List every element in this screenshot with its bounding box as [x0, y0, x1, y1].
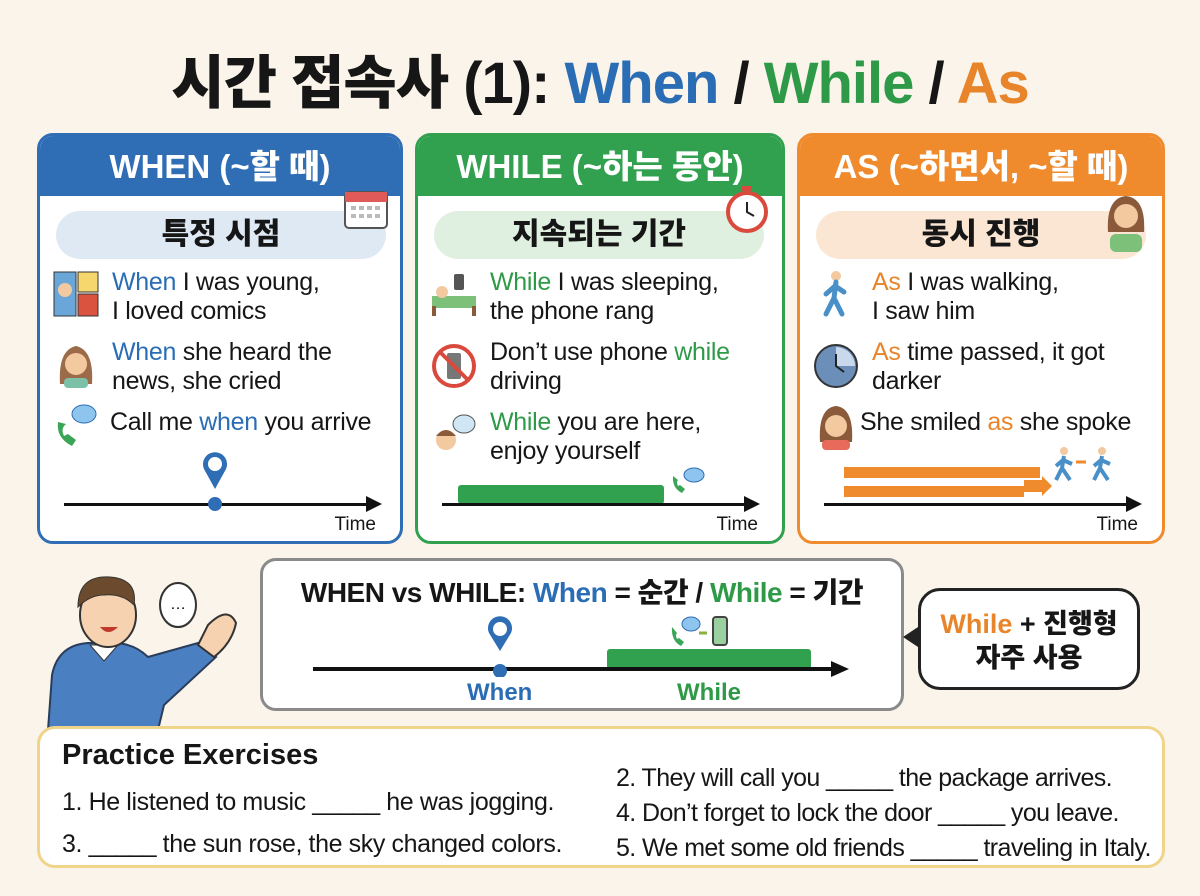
subheading: 지속되는 기간: 지속되는 기간 — [512, 218, 686, 251]
example 2: Don’t use phone while — [490, 338, 730, 366]
example 1 — [112, 268, 320, 325]
icon: phone with bubble — [58, 404, 96, 446]
header: AS: AS (~하면서, ~할 때) — [834, 148, 1128, 185]
icon: boy thinking — [436, 414, 476, 450]
panel: WHEN vs WHILE comparison — [260, 558, 904, 711]
example 2 — [490, 338, 730, 395]
subheading: 특정 시점 — [56, 211, 386, 259]
panel: AS — [797, 133, 1165, 544]
comparison timeline: While — [677, 679, 741, 706]
callout: While + 진행형 — [918, 588, 1140, 690]
exercises right column: 2. They will call you _____ the package arrives. — [616, 764, 1112, 792]
example 2: When she heard the — [112, 338, 332, 366]
icon: no phone — [432, 344, 476, 388]
illustration: teacher — [47, 576, 237, 728]
panel: WHILE: Time — [716, 514, 758, 535]
example 2: darker — [872, 367, 941, 395]
example 2: driving — [490, 367, 562, 395]
example 1: I loved comics — [112, 297, 266, 325]
example 3: She smiled as she spoke — [860, 408, 1131, 436]
header: WHEN — [40, 136, 400, 196]
example 2 — [112, 338, 332, 395]
icon: sleeping — [432, 274, 476, 316]
example 1: When I was young, — [112, 268, 320, 296]
exercises right column: 4. Don’t forget to lock the door _____ you leave. — [616, 799, 1119, 827]
icon: comics — [54, 272, 98, 316]
comparison timeline — [313, 616, 849, 706]
header: WHILE: WHILE (~하는 동안) — [456, 148, 744, 185]
example 1: As I was walking, — [872, 268, 1059, 296]
practice heading: Practice Exercises — [62, 739, 318, 771]
panel: AS: Time — [1096, 514, 1138, 535]
callout: While + 진행형: 자주 사용 — [976, 643, 1082, 673]
example 1: I saw him — [872, 297, 975, 325]
exercises left column: 3. _____ the sun rose, the sky changed colors. — [62, 830, 562, 858]
example 2: As time passed, it got — [872, 338, 1104, 366]
timeline: as — [824, 447, 1142, 535]
example 2: news, she cried — [112, 367, 281, 395]
icon: calendar — [344, 191, 388, 229]
icon: smiling woman — [820, 406, 852, 450]
example 3: enjoy yourself — [490, 437, 640, 465]
timeline: while — [442, 468, 760, 535]
example 3 — [490, 408, 701, 465]
example 1: While I was sleeping, — [490, 268, 719, 296]
icon: crying girl — [60, 346, 92, 388]
exercises left column — [62, 788, 562, 858]
timeline: when — [64, 452, 382, 535]
example 3: While you are here, — [490, 408, 701, 436]
example 1 — [490, 268, 719, 325]
subheading: 지속되는 기간 — [434, 211, 764, 259]
subheading: 동시 진행 — [816, 211, 1146, 259]
callout: While + 진행형: While + 진행형 — [940, 609, 1118, 639]
title: 시간 접속사 (1): When / While / As — [171, 51, 1029, 116]
header: AS — [800, 136, 1162, 196]
example 1: the phone rang — [490, 297, 654, 325]
icon: walking man — [824, 271, 846, 316]
header: WHILE — [418, 136, 782, 196]
subheading: 동시 진행: 동시 진행 — [922, 218, 1040, 251]
comparison heading: WHEN vs WHILE: When = 순간 / While = 기간 — [301, 577, 863, 608]
panel: practice exercises — [37, 726, 1165, 868]
example 3: Call me when you arrive — [110, 408, 371, 436]
example 1 — [872, 268, 1059, 325]
icon: waving woman — [1108, 196, 1144, 252]
exercises right column — [616, 764, 1151, 862]
subheading: 특정 시점: 특정 시점 — [162, 218, 280, 251]
icon: alarm clock — [726, 186, 768, 233]
comparison timeline: When — [467, 679, 532, 706]
panel: WHEN: Time — [334, 514, 376, 535]
panel: WHEN — [37, 133, 403, 544]
icon: clock — [814, 344, 858, 388]
exercises left column: 1. He listened to music _____ he was jogging. — [62, 788, 554, 816]
panel: WHILE — [415, 133, 785, 544]
header: WHEN: WHEN (~할 때) — [109, 148, 331, 185]
exercises right column: 5. We met some old friends _____ traveling in Italy. — [616, 834, 1151, 862]
illustration: teacher: … — [170, 596, 186, 613]
example 2 — [872, 338, 1104, 395]
